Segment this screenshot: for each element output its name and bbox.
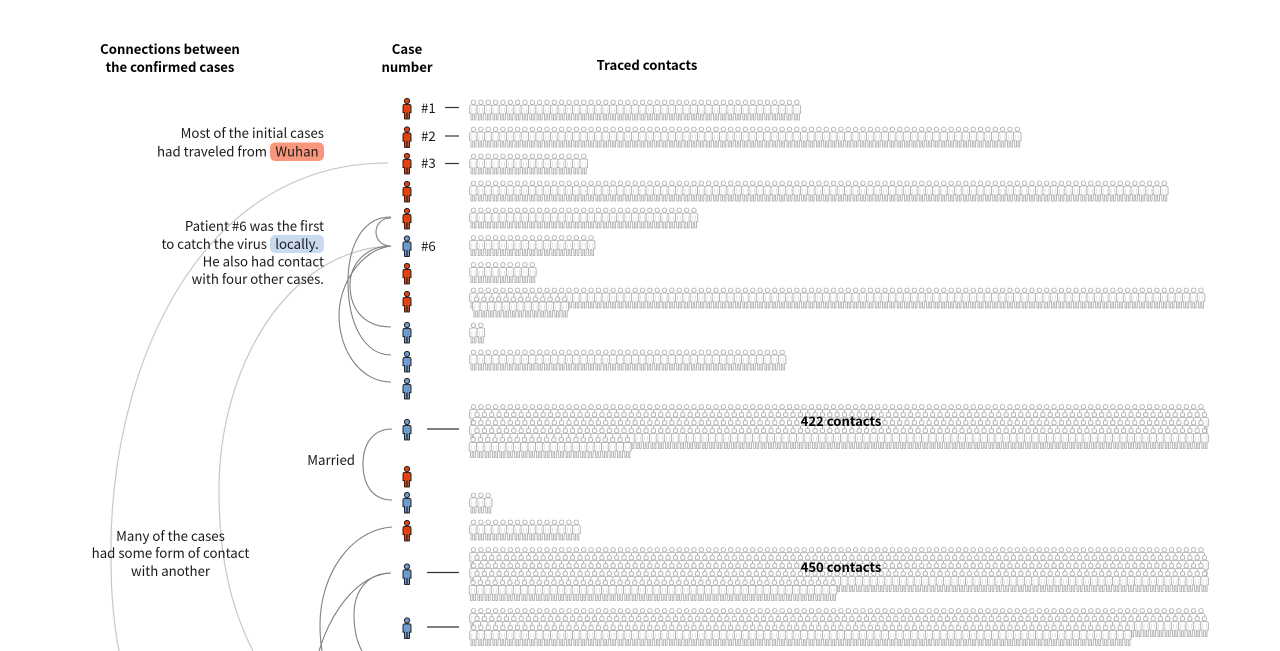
contacts row: case 3 [470,154,588,174]
contacts row: case 2 [470,127,1021,147]
annotation: married: Married [307,450,355,469]
annotation: patient 6 [161,216,324,288]
heading: connections between the confirmed cases: the confirmed cases [106,57,235,76]
contacts rows: case 8 [470,288,1205,317]
contacts row: case 6 [470,236,595,256]
annotation: patient 6: with four other cases. [192,269,324,288]
case number labels: #2 [421,126,436,145]
annotation: patient 6: locally. [275,234,319,253]
contacts row: case 1 [470,100,801,120]
heading: case number: number [381,57,433,76]
contacts row: case 14 [470,520,580,540]
contacts block: 450 contacts [469,548,1208,600]
annotation: initial cases from Wuhan: had traveled from [157,142,267,160]
contacts row: case 9 [470,323,485,343]
leader lines [427,108,459,627]
heading: traced contacts: Traced contacts [597,55,698,74]
contacts row: case 4 [470,181,1168,201]
case number labels: #3 [421,153,436,172]
case number labels: #1 [421,98,436,117]
annotation: patient 6: He also had contact [203,252,324,270]
contacts row: case 7 [470,262,536,282]
label: 450 contacts: 450 contacts [801,557,882,576]
case number labels: #6 [421,236,436,255]
annotation: contact with another: with another [131,561,211,580]
annotation: contact with another: Many of the cases [116,526,225,545]
heading: connections between the confirmed cases: Connections between [100,39,240,58]
annotation: contact with another [92,526,249,580]
heading: case number [381,39,433,76]
connection arcs [111,163,392,651]
contacts row: case 10 [470,350,786,370]
heading: connections between the confirmed cases [100,39,240,76]
annotation: initial cases from Wuhan [157,123,324,161]
annotation: patient 6: to catch the virus [161,234,267,253]
annotation: initial cases from Wuhan: Most of the initial cases [181,123,324,142]
case icons column [403,98,411,638]
contacts row: case 13 [470,493,492,513]
contacts block: case 16 [470,608,1208,646]
annotation: initial cases from Wuhan: Wuhan [275,142,319,160]
label: 422 contacts: 422 contacts [801,411,882,430]
contacts block: 422 contacts [469,404,1208,458]
heading: case number: Case [392,39,423,58]
annotation: patient 6: Patient #6 was the first [185,216,324,235]
contacts row: case 5 [470,208,698,228]
case number labels [421,98,436,255]
annotation: contact with another: had some form of contact [92,543,249,562]
